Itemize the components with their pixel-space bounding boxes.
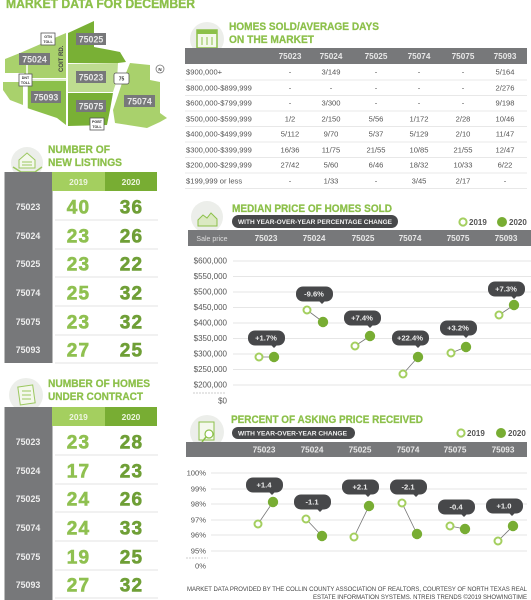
panel: homes sold table: 11/75: [322, 146, 340, 154]
icon: house in hand: [11, 147, 43, 179]
map of zip codes: DNT: [22, 76, 30, 80]
panel: percent of asking price chart: 75023: [253, 446, 276, 454]
panel: homes sold table: 9/70: [324, 130, 338, 138]
panel: percent of asking price chart: +2.1: [352, 482, 368, 492]
panel: percent of asking price chart: 95%: [191, 546, 206, 556]
panel: median price chart: 75025: [352, 234, 375, 243]
panel: new listings: 75023: [16, 202, 40, 212]
panel: homes under contract: 23: [67, 432, 90, 454]
panel: homes sold table: -: [375, 98, 378, 108]
panel: homes sold table: 18/32: [409, 160, 429, 170]
panel: median price chart: +3.2%: [447, 324, 469, 332]
panel: median price chart: +1.7%: [255, 334, 277, 342]
panel: homes sold table: -: [504, 176, 507, 186]
panel: homes under contract: 75074: [16, 523, 40, 533]
panel: homes sold table: $900,000+: [186, 68, 223, 76]
panel: new listings: 23: [67, 226, 90, 248]
panel: new listings: 2019: [69, 177, 88, 187]
icon: houses: [191, 201, 223, 233]
panel: percent of asking price chart: 98%: [191, 500, 206, 508]
panel: new listings: 75024: [16, 231, 40, 241]
panel: homes sold table: $200,000-$299,999: [186, 160, 252, 170]
panel: percent of asking price chart: -2.1: [401, 482, 415, 492]
source note: MARKET DATA PROVIDED BY THE COLLIN COUNTY ASSOCIATION OF REALTORS, COURTESY OF NORTH TEXAS REAL: [187, 587, 528, 593]
panel: median price chart: 75075: [447, 234, 470, 243]
panel: homes sold table: 75074: [408, 52, 431, 61]
panel: homes sold table: -: [375, 84, 378, 92]
map of zip codes: TOLL: [21, 81, 31, 85]
panel: median price chart: $400,000: [194, 318, 228, 328]
panel: homes sold table: -: [418, 84, 421, 92]
panel: percent of asking price chart: 75093: [492, 446, 515, 454]
panel: percent of asking price chart: 75074: [397, 446, 420, 454]
panel: new listings: 26: [120, 226, 143, 248]
panel: homes sold table: 75025: [365, 52, 388, 61]
panel: homes sold table: 2/28: [456, 114, 470, 124]
panel: percent of asking price chart: 97%: [191, 516, 206, 524]
panel: homes sold table: $500,000-$599,999: [186, 114, 252, 124]
panel: percent of asking price chart: 75025: [349, 446, 372, 454]
panel: homes sold table: -: [418, 98, 421, 108]
panel: median price chart: $350,000: [194, 334, 228, 343]
map of zip codes: 75093: [34, 92, 58, 102]
panel: new listings: 25: [67, 284, 90, 304]
map of zip codes: TOLL: [43, 40, 53, 44]
panel: homes sold table: 6/22: [498, 160, 512, 170]
panel: median price chart: 75074: [399, 234, 422, 243]
panel: homes sold table: $600,000-$799,999: [186, 98, 252, 108]
panel: new listings: [4, 144, 158, 363]
panel: percent of asking price chart: 2020: [508, 429, 526, 438]
panel: homes sold table: 1/2: [285, 114, 295, 124]
panel: percent of asking price chart: [186, 414, 527, 570]
panel: homes sold table: 9/198: [495, 98, 515, 108]
panel: homes sold table: -: [462, 98, 465, 108]
panel: homes under contract: 27: [67, 576, 90, 596]
panel: homes under contract: 33: [120, 518, 143, 540]
panel: homes sold table: -: [462, 68, 465, 76]
panel: homes under contract: 17: [67, 462, 90, 482]
source note: [187, 587, 528, 600]
panel: homes sold table: 2/17: [456, 176, 470, 186]
panel: homes under contract: 2019: [69, 412, 88, 422]
panel: homes sold table: 2/10: [456, 130, 470, 138]
panel: homes sold table: 11/47: [496, 130, 514, 138]
panel: homes sold table: 3/149: [321, 68, 341, 76]
panel: median price chart: 2020: [509, 218, 527, 227]
panel: homes sold table: 27/42: [280, 160, 300, 170]
panel: homes sold table: 21/55: [453, 146, 473, 154]
map of zip codes: 75074: [127, 96, 152, 106]
panel: new listings: 36: [120, 198, 143, 218]
panel: homes sold table: 10/33: [453, 160, 473, 170]
icon: calendar: [190, 22, 224, 56]
map of zip codes: PGBT: [92, 120, 103, 124]
panel: median price chart: $450,000: [194, 303, 228, 312]
panel: homes sold table: 1/172: [409, 114, 429, 124]
panel: median price chart: +7.4%: [351, 314, 373, 322]
panel: median price chart: Sale price: [196, 236, 228, 243]
panel: homes under contract: 75025: [16, 494, 40, 504]
panel: new listings: 25: [120, 340, 143, 362]
panel: new listings: 75025: [16, 259, 40, 269]
panel: new listings: NUMBER OF: [48, 144, 110, 156]
panel: median price chart: -9.6%: [304, 290, 324, 298]
panel: percent of asking price chart: WITH YEAR-OVER-YEAR CHANGE: [238, 430, 348, 438]
panel: homes sold table: 5/129: [409, 130, 429, 138]
map of zip codes: N: [158, 67, 162, 72]
panel: new listings: 75074: [16, 288, 40, 298]
panel: homes sold table: $800,000-$899,999: [186, 84, 252, 92]
panel: homes under contract: UNDER CONTRACT: [48, 391, 143, 403]
panel: new listings: 22: [120, 254, 143, 276]
panel: new listings: 27: [67, 340, 90, 362]
map of zip codes: 75024: [22, 54, 47, 64]
panel: percent of asking price chart: 99%: [191, 484, 206, 494]
panel: new listings: 2020: [122, 177, 141, 187]
panel: median price chart: WITH YEAR-OVER-YEAR PERCENTAGE CHANGE: [238, 219, 393, 226]
panel: homes sold table: 75024: [320, 52, 343, 61]
panel: percent of asking price chart: 2019: [467, 429, 485, 438]
panel: homes sold table: 5/56: [369, 114, 383, 124]
panel: new listings: 32: [120, 312, 143, 334]
map of zip codes: GTN: [44, 35, 52, 39]
panel: homes sold table: $400,000-$499,999: [186, 130, 252, 138]
panel: homes sold table: $300,000-$399,999: [186, 146, 252, 154]
map of zip codes: 75075: [79, 102, 103, 112]
panel: homes under contract: 32: [120, 576, 143, 596]
panel: homes sold table: 75023: [279, 52, 302, 61]
panel: median price chart: [188, 201, 531, 406]
panel: homes under contract: 23: [120, 462, 143, 482]
panel: homes sold table: -: [289, 176, 292, 186]
map of zip codes: COIT RD.: [59, 45, 65, 72]
panel: percent of asking price chart: 0%: [195, 562, 206, 570]
panel: new listings: 75093: [16, 345, 40, 355]
panel: homes under contract: 2020: [122, 412, 141, 422]
panel: percent of asking price chart: 96%: [191, 530, 206, 540]
panel: homes sold table: 5/60: [324, 160, 338, 170]
panel: homes sold table: 10/46: [495, 114, 515, 124]
map of zip codes: 75: [119, 76, 124, 82]
panel: median price chart: $300,000: [194, 350, 228, 358]
panel: homes sold table: 3/45: [412, 176, 426, 186]
panel: median price chart: 2019: [469, 218, 487, 227]
panel: homes sold table: 12/47: [495, 146, 515, 154]
panel: homes sold table: -: [375, 176, 378, 186]
panel: homes sold table: -: [289, 84, 292, 92]
panel: homes under contract: 75075: [16, 552, 40, 562]
panel: percent of asking price chart: 75075: [444, 446, 467, 454]
panel: homes under contract: 75093: [16, 580, 40, 590]
panel: homes sold table: 2/276: [495, 84, 515, 92]
panel: new listings: 23: [67, 312, 90, 334]
map of zip codes: TOLL: [92, 125, 102, 129]
panel: homes sold table: 3/300: [321, 98, 341, 108]
panel: homes sold table: 16/36: [280, 146, 300, 154]
panel: median price chart: $200,000: [194, 380, 228, 390]
panel: percent of asking price chart: -0.4: [449, 502, 463, 512]
panel: homes sold table: ON THE MARKET: [229, 34, 314, 46]
panel: homes sold table: [185, 21, 527, 188]
panel: homes under contract: 75023: [16, 437, 40, 447]
map of zip codes: [3, 21, 167, 130]
panel: new listings: 75075: [16, 317, 40, 327]
panel: homes under contract: 19: [67, 548, 90, 568]
panel: median price chart: +7.3%: [495, 284, 517, 294]
panel: median price chart: $550,000: [194, 272, 228, 281]
map of zip codes: 75023: [79, 72, 103, 82]
icon: contract papers: [9, 378, 43, 412]
panel: percent of asking price chart: +1.0: [496, 502, 512, 510]
panel: homes sold table: 75075: [452, 52, 475, 61]
panel: homes sold table: -: [462, 84, 465, 92]
panel: percent of asking price chart: -1.1: [305, 498, 319, 506]
panel: homes sold table: 5/164: [495, 68, 515, 76]
panel: new listings: 40: [67, 198, 90, 218]
panel: median price chart: MEDIAN PRICE OF HOMES SOLD: [232, 203, 392, 215]
panel: new listings: 32: [120, 284, 143, 304]
panel: median price chart: +22.4%: [397, 334, 423, 342]
panel: percent of asking price chart: 100%: [187, 468, 206, 478]
panel: homes sold table: -: [289, 98, 292, 108]
panel: percent of asking price chart: PERCENT OF ASKING PRICE RECEIVED: [231, 414, 423, 426]
panel: median price chart: $500,000: [194, 288, 228, 296]
map of zip codes: 75025: [79, 34, 103, 44]
panel: homes sold table: -: [330, 84, 333, 92]
panel: homes sold table: -: [289, 68, 292, 76]
panel: homes under contract: 24: [67, 490, 90, 510]
panel: median price chart: 75023: [255, 234, 278, 243]
panel: homes sold table: 6/46: [369, 160, 383, 170]
panel: median price chart: 75093: [495, 234, 518, 243]
panel: homes sold table: 75093: [494, 52, 517, 61]
panel: median price chart: $0: [218, 396, 228, 406]
panel: homes sold table: HOMES SOLD/AVERAGE DAYS: [229, 21, 379, 33]
panel: homes under contract: 75024: [16, 466, 40, 476]
panel: new listings: 23: [67, 254, 90, 276]
panel: homes sold table: $199,999 or less: [186, 176, 242, 186]
panel: homes sold table: 2/150: [321, 114, 341, 124]
panel: homes under contract: [4, 378, 158, 600]
panel: homes under contract: 24: [67, 518, 90, 540]
panel: percent of asking price chart: +1.4: [256, 480, 272, 490]
panel: homes sold table: 21/55: [366, 146, 386, 154]
panel: median price chart: $250,000: [194, 365, 228, 374]
panel: homes under contract: NUMBER OF HOMES: [48, 378, 150, 390]
panel: homes under contract: 26: [120, 490, 143, 510]
panel: homes under contract: 25: [120, 548, 143, 568]
icon: document with magnifier: [190, 415, 224, 449]
panel: median price chart: $600,000: [194, 256, 228, 266]
panel: homes sold table: 5/112: [281, 130, 299, 138]
panel: homes sold table: -: [375, 68, 378, 76]
panel: homes sold table: 10/85: [409, 146, 429, 154]
panel: new listings: NEW LISTINGS: [48, 157, 122, 169]
panel: homes sold table: 1/33: [324, 176, 338, 186]
panel: percent of asking price chart: 75024: [301, 446, 324, 454]
panel: homes sold table: -: [418, 68, 421, 76]
panel: homes under contract: 28: [120, 432, 143, 454]
panel: median price chart: 75024: [303, 234, 326, 243]
panel: homes sold table: 5/37: [369, 130, 383, 138]
